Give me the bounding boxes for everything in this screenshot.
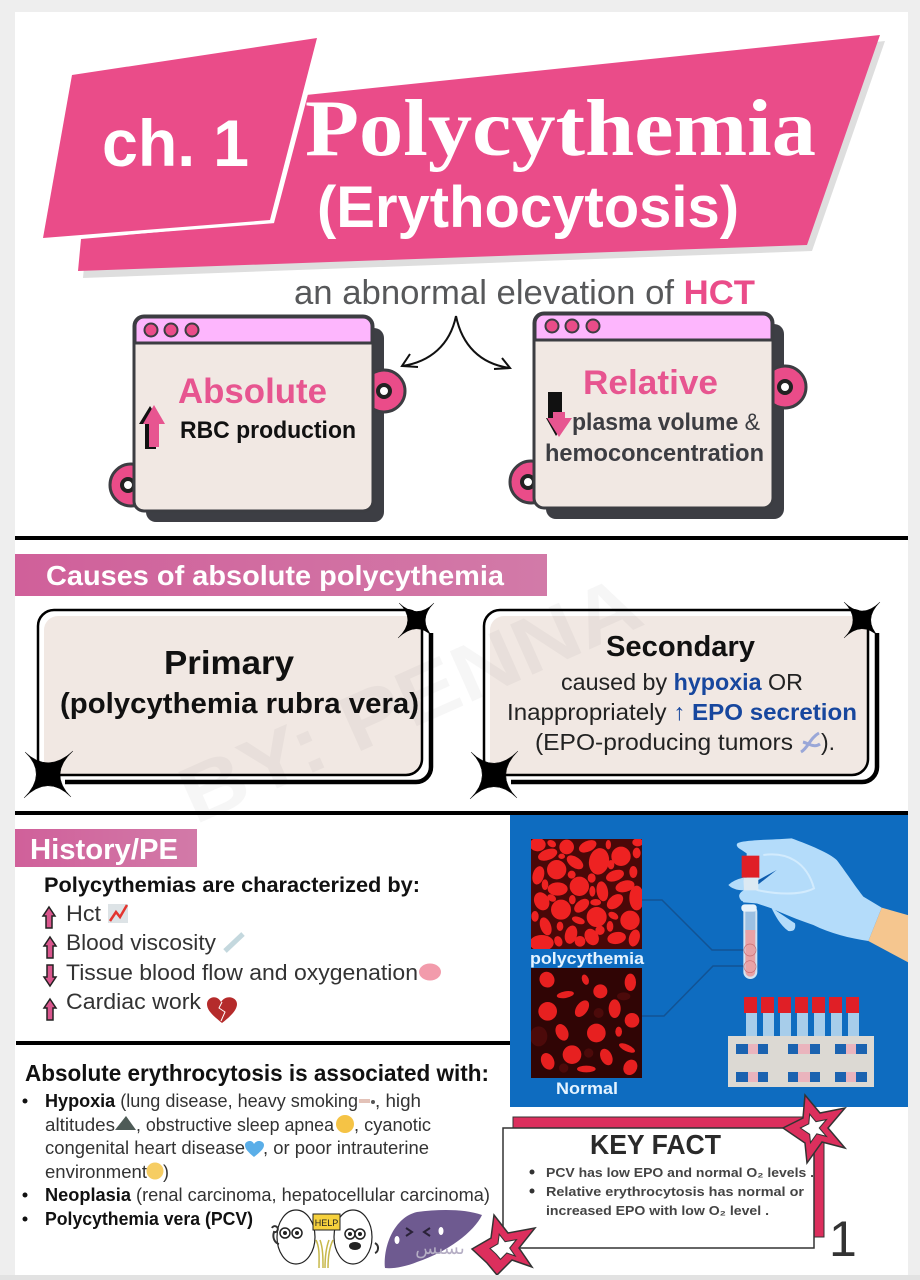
icon: blue heart	[245, 1141, 264, 1157]
text block: absolute erythrocytosis: altitudes	[45, 1115, 115, 1135]
panel: absolute	[110, 316, 405, 522]
heading: history/PE: History/PE	[30, 834, 178, 866]
icon: down arrow	[44, 965, 56, 986]
panel: secondary: (EPO-producing tumors	[535, 729, 793, 755]
icon: mountain	[115, 1116, 136, 1130]
heading: causes of absolute polycythemia	[15, 554, 547, 596]
icon: liver: ىسىس	[415, 1238, 465, 1259]
icon: baby face	[146, 1162, 164, 1180]
text block: absolute erythrocytosis: , obstructive sleep apnea	[136, 1115, 335, 1135]
title banner: ch. 1	[102, 106, 249, 180]
icon: star bottom left	[470, 751, 518, 799]
text block: absolute erythrocytosis: Hypoxia (lung disease, heavy smoking	[45, 1091, 358, 1111]
panel: key fact: KEY FACT	[590, 1129, 721, 1160]
panel: secondary: caused by hypoxia OR	[561, 669, 803, 695]
icon: star top right	[844, 602, 880, 638]
icon: dna	[801, 733, 820, 752]
icon: kidneys with help sign: HELP	[315, 1218, 338, 1228]
panel: secondary: Secondary	[606, 631, 755, 663]
panel: key fact: PCV has low EPO and normal O₂ levels .	[546, 1165, 814, 1180]
text block: absolute erythrocytosis: , high	[375, 1091, 421, 1111]
watermark: BY: PENNA	[166, 558, 654, 841]
title banner: Polycythemia	[305, 83, 816, 173]
icon: liver	[385, 1210, 482, 1268]
panel: secondary: ).	[821, 729, 835, 755]
icon: up arrow	[43, 907, 55, 928]
panel: secondary: Inappropriately ↑ EPO secretion	[507, 699, 857, 725]
text block: absolute erythrocytosis: congenital heart disease	[45, 1138, 245, 1158]
icon: syringe	[225, 934, 243, 951]
icon: broken heart	[207, 997, 237, 1023]
text block: absolute erythrocytosis: )	[163, 1162, 169, 1182]
text block: polycythemias characteristics: Blood viscosity	[66, 930, 216, 955]
heading: causes of absolute polycythemia: Causes of absolute polycythemia	[46, 560, 504, 591]
text block: polycythemias characteristics	[43, 874, 441, 1023]
polycythemia smear	[531, 839, 642, 949]
panel: primary: Primary	[164, 644, 295, 681]
text block: absolute erythrocytosis: Polycythemia vera (PCV)	[45, 1209, 253, 1229]
icon: star top right	[783, 1095, 845, 1163]
panel: secondary	[470, 602, 880, 799]
text block: absolute erythrocytosis	[22, 1060, 490, 1229]
text block: absolute erythrocytosis: , cyanotic	[354, 1115, 431, 1135]
icon: star bottom left	[24, 751, 73, 798]
page number: 1	[829, 1211, 857, 1267]
icon: up arrow	[44, 999, 56, 1020]
panel: primary	[24, 603, 434, 798]
subtitle: an abnormal elevation of HCT	[294, 274, 755, 312]
panel: absolute: Absolute	[178, 372, 327, 411]
text block: absolute erythrocytosis: , or poor intrauterine	[263, 1138, 429, 1158]
gloved hand with test tube	[728, 838, 908, 979]
panel: relative: Relative	[583, 364, 718, 402]
icon: star bottom left	[472, 1215, 535, 1275]
icon: down arrow	[546, 392, 572, 437]
icon: up arrow	[44, 937, 56, 958]
label: normal: Normal	[556, 1079, 618, 1098]
normal smear	[531, 968, 642, 1078]
test tube rack	[728, 997, 874, 1087]
text block: polycythemias characteristics: Polycythemias are characterized by:	[44, 874, 420, 897]
text block: polycythemias characteristics: Cardiac work	[66, 989, 202, 1014]
panel: key fact: Relative erythrocytosis has normal or	[546, 1184, 804, 1199]
label: polycythemia: polycythemia	[530, 949, 645, 968]
icon: cigarette	[359, 1099, 375, 1104]
text block: polycythemias characteristics: Hct	[66, 901, 101, 926]
text block: polycythemias characteristics: Tissue blood flow and oxygenation	[66, 960, 418, 985]
icon: up arrow	[139, 405, 165, 449]
text block: absolute erythrocytosis: environment	[45, 1162, 147, 1182]
panel: relative: hemoconcentration	[545, 440, 764, 467]
panel: key fact: increased EPO with low O₂ level .	[546, 1203, 769, 1218]
heading: history/PE	[15, 829, 197, 867]
panel: blood illustration	[510, 815, 910, 1107]
icon: kidneys with help sign	[272, 1210, 378, 1268]
text block: absolute erythrocytosis: Absolute erythrocytosis is associated with:	[25, 1060, 489, 1086]
title banner: (Erythocytosis)	[317, 175, 739, 240]
connector lines	[642, 900, 745, 1016]
panel: relative: plasma volume &	[572, 409, 760, 436]
icon: star top right	[398, 603, 434, 638]
arrows to the two types	[402, 316, 510, 369]
title banner	[43, 35, 885, 278]
text block: absolute erythrocytosis: Neoplasia (renal carcinoma, hepatocellular carcinoma)	[45, 1185, 490, 1205]
panel: key fact	[472, 1095, 845, 1275]
icon: chart	[108, 904, 128, 923]
icon: brain	[419, 964, 441, 980]
icon: sleeping face	[336, 1115, 354, 1133]
panel: relative	[510, 313, 806, 519]
panel: absolute: RBC production	[180, 417, 356, 444]
panel: primary: (polycythemia rubra vera)	[60, 688, 419, 720]
